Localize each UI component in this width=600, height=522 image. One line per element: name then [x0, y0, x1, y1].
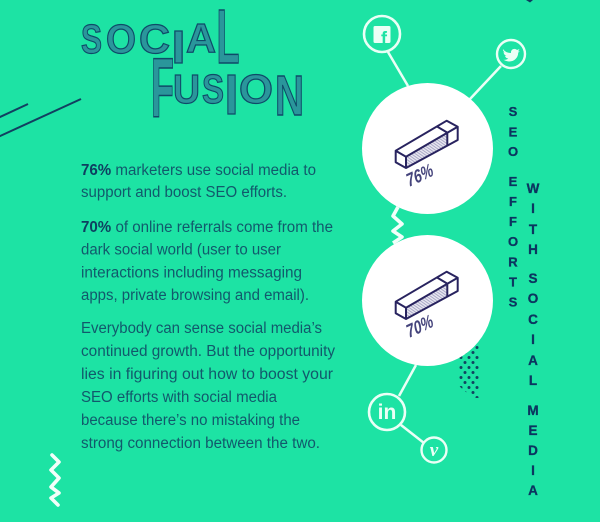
vertical text: WITH SOCIAL MEDIA: E [528, 423, 538, 438]
title: Social Fusion: C [139, 16, 170, 62]
icon: facebook: f [381, 28, 388, 48]
top edge mark [526, 0, 533, 2]
text block: 70%: interactions including messaging [81, 264, 302, 282]
stat circle: 70% [362, 235, 493, 366]
text block: 70%: apps, private browsing and email). [81, 287, 309, 304]
icon: linkedin: in [378, 401, 396, 424]
vertical text: WITH SOCIAL MEDIA: L [529, 373, 537, 388]
text block: growth: SEO efforts with social media [81, 389, 277, 406]
vertical text: SEO EFFORTS [508, 104, 518, 310]
icon: facebook [364, 16, 400, 52]
text block: growth: strong connection between the two. [81, 435, 320, 452]
vertical text: SEO EFFORTS: F [509, 194, 517, 209]
title: Social Fusion: S [202, 66, 224, 112]
title: Social Fusion: I [224, 63, 238, 127]
text block: growth [81, 320, 335, 452]
title: Social Fusion: I [172, 21, 186, 73]
text block: 70%: 70% of online referrals come from the [81, 219, 333, 236]
vertical text: WITH SOCIAL MEDIA: W [527, 181, 540, 196]
title: Social Fusion: A [186, 15, 216, 61]
text block: growth: Everybody can sense social media’s [81, 320, 322, 337]
vertical text: WITH SOCIAL MEDIA: M [527, 403, 539, 418]
text block: 76% [81, 162, 316, 201]
title: Social Fusion: F [151, 41, 174, 135]
vertical text: SEO EFFORTS: S [509, 294, 518, 310]
icon: linkedin [369, 394, 405, 430]
vertical text: WITH SOCIAL MEDIA: A [528, 483, 538, 498]
stat circle: 76% [362, 83, 493, 214]
title: Social Fusion: O [239, 66, 273, 112]
title: Social Fusion: O [106, 16, 136, 62]
vertical text: WITH SOCIAL MEDIA: I [531, 463, 535, 478]
dot pattern [459, 340, 479, 398]
title: Social Fusion: S [81, 16, 102, 62]
icon: twitter [497, 40, 525, 68]
vertical text: WITH SOCIAL MEDIA: S [528, 271, 538, 286]
vertical text: WITH SOCIAL MEDIA: I [531, 201, 535, 216]
vertical text: SEO EFFORTS: O [508, 234, 518, 249]
text block: growth: continued growth. But the opportunity [81, 343, 335, 360]
vertical text: SEO EFFORTS: R [508, 254, 518, 270]
chart: isometric bar 70%: 70% [404, 311, 436, 342]
text block: growth: lies in figuring out how to boost your [81, 366, 333, 383]
title: Social Fusion [81, 0, 304, 135]
vertical text: WITH SOCIAL MEDIA: D [528, 443, 538, 458]
zigzag: between circles [393, 207, 402, 243]
vertical text: SEO EFFORTS: E [509, 124, 518, 140]
icon: vimeo [422, 438, 446, 462]
title: Social Fusion: U [173, 66, 200, 112]
vertical text: WITH SOCIAL MEDIA: O [528, 291, 538, 306]
vertical text: WITH SOCIAL MEDIA: C [528, 312, 538, 327]
vertical text: WITH SOCIAL MEDIA [527, 181, 540, 498]
decorative diagonal lines [0, 99, 81, 136]
zigzag: bottom left [51, 455, 59, 505]
text block: 70%: dark social world (user to user [81, 242, 281, 258]
vertical text: SEO EFFORTS: T [509, 274, 517, 290]
vertical text: SEO EFFORTS: F [509, 214, 517, 229]
vertical text: WITH SOCIAL MEDIA: I [531, 332, 535, 347]
vertical text: WITH SOCIAL MEDIA: H [528, 242, 538, 257]
chart: isometric bar 76%: 76% [404, 160, 436, 191]
vertical text: SEO EFFORTS: O [508, 144, 518, 159]
connector lines [388, 52, 501, 443]
vertical text: SEO EFFORTS: S [509, 104, 518, 119]
vertical text: WITH SOCIAL MEDIA: A [528, 353, 538, 368]
icon: vimeo: v [430, 440, 439, 461]
vertical text: WITH SOCIAL MEDIA: T [529, 222, 538, 237]
title: Social Fusion: N [275, 64, 304, 128]
text block: 70% [81, 219, 333, 304]
text block: growth: because there’s no mistaking the [81, 412, 300, 429]
text block: 76%: 76% marketers use social media to [81, 162, 316, 179]
text block: 76%: support and boost SEO efforts. [81, 184, 287, 201]
vertical text: SEO EFFORTS: E [509, 174, 518, 189]
